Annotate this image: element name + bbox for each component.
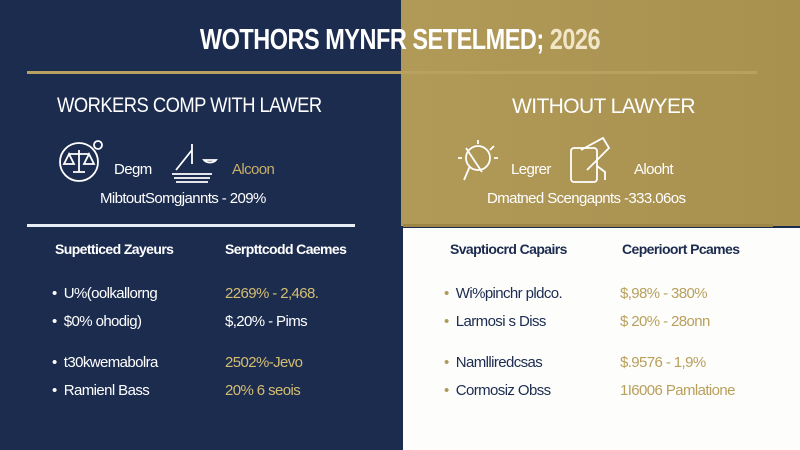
table: left: Serpttcodd Caemes	[225, 241, 346, 257]
panel: right gold top	[401, 0, 800, 226]
heading: with lawyer: WORKERS COMP WITH LAWER	[57, 94, 322, 117]
table: left: $,20% - Pims	[225, 313, 307, 330]
heading: without lawyer: WITHOUT LAWYER	[512, 95, 695, 118]
icon: scale on book	[172, 144, 218, 183]
table: right: • Wi%pinchr pldco.	[444, 285, 562, 302]
table: left: • Ramienl Bass	[52, 382, 149, 399]
table: right: $.9576 - 1,9%	[620, 354, 706, 371]
label: Alcoon: Alcoon	[232, 161, 274, 178]
icon: scales in circle	[59, 140, 103, 182]
table: right: $,98% - 380%	[620, 285, 707, 302]
table: left: Supetticed Zayeurs	[55, 241, 173, 257]
title: WOTHORS MYNFR SETELMED; 2026	[200, 24, 600, 56]
table: left: 2502%-Jevo	[225, 354, 302, 371]
icon: pen/bulb	[458, 140, 498, 180]
table: right: • Cormosiz Obss	[444, 382, 551, 399]
table: left: 2269% - 2,468.	[225, 285, 318, 302]
subtitle right: Dmatned Scengapnts -333.06os	[487, 190, 685, 207]
table: right: Svaptiocrd Capairs	[450, 241, 567, 257]
icon: document	[570, 136, 610, 183]
panel: left navy	[0, 0, 401, 450]
label: Degm: Degm	[114, 161, 152, 178]
panel: right white bottom	[403, 228, 800, 450]
table: right: • Larmosi s Diss	[444, 313, 546, 330]
table: left: • U%(oolkallorng	[52, 285, 157, 302]
table: right	[444, 241, 740, 399]
table: right: • Namlliredcsas	[444, 354, 542, 371]
subtitle left: MibtoutSomgjannts - 209%	[100, 190, 266, 207]
label: Legrer: Legrer	[511, 161, 551, 178]
table: left	[52, 241, 346, 399]
label: Alooht: Alooht	[634, 161, 673, 178]
table: left: 20% 6 seois	[225, 382, 300, 399]
table: left: • $0% ohodig)	[52, 313, 141, 330]
table: left: • t30kwemabolra	[52, 354, 158, 371]
table: right: $ 20% - 28onn	[620, 313, 710, 330]
table: right: Ceperioort Pcames	[622, 241, 739, 257]
table: right: 1I6006 Pamlatione	[620, 382, 735, 399]
